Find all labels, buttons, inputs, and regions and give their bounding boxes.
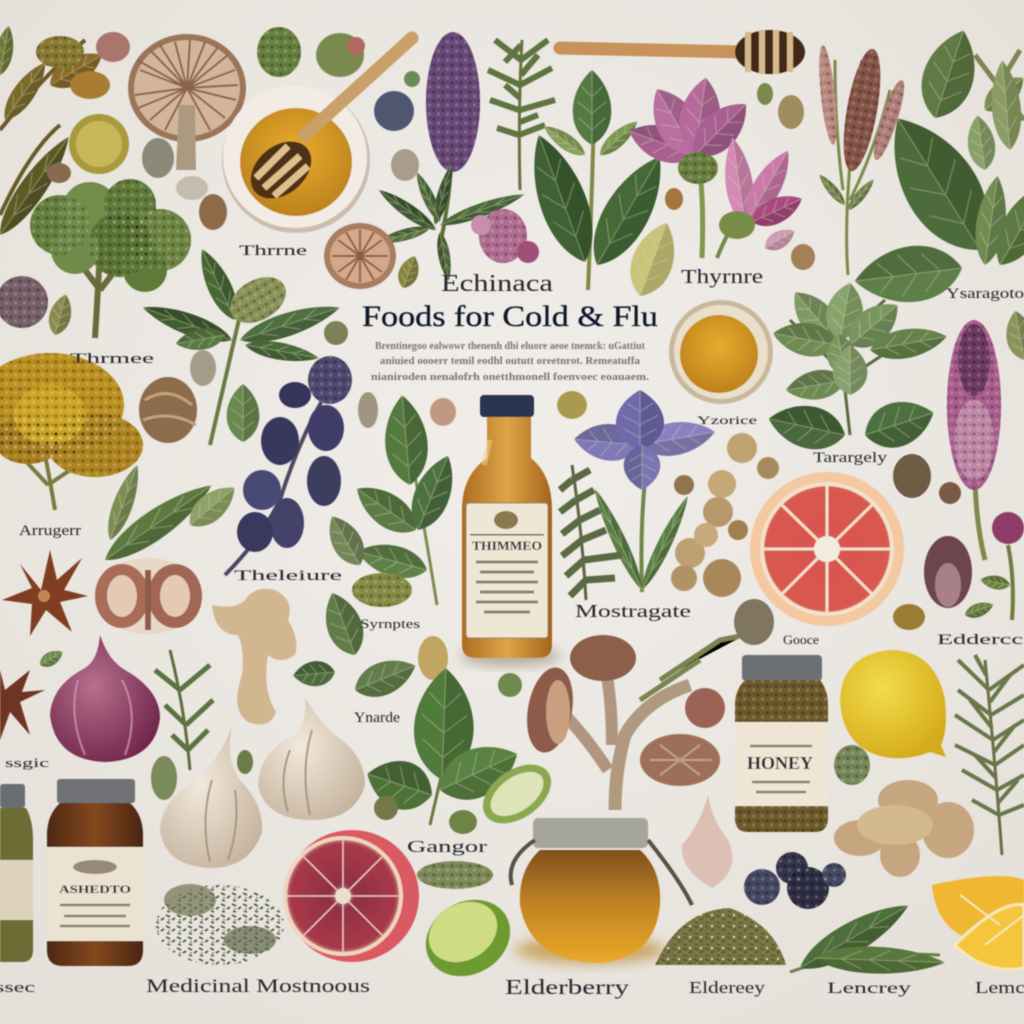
icon: herb jar labelled Honey [735,655,828,832]
labels [0,243,1024,999]
icon: lavender spike [375,32,527,282]
label: Ysaragoto: Ysaragoto [946,286,1024,302]
icon: large right leaves [851,99,1024,309]
bottle label [466,503,548,638]
label: Thrmee: Thrmee [70,351,155,367]
icon: blackberries [744,852,846,909]
label: Elderberry: Elderberry [505,975,630,999]
body text [371,341,650,383]
icon: star anise top [2,550,88,636]
icon: top-right leaves [911,23,1024,151]
top-left herb sprigs [0,24,227,242]
icon: broccoli-shaped tree [30,179,191,338]
icon: ginger root [212,589,296,724]
icon: central herb sprig with long leaves [139,244,348,445]
icon: pink flower [623,75,759,258]
icon: yellow flower cluster [0,353,143,510]
label: Syrnptes: Syrnptes [360,616,420,631]
label: Arrugerr: Arrugerr [19,523,81,539]
label: Ynarde: Ynarde [354,710,400,726]
icon: sliced mushroom [324,223,424,291]
icon: small blueberry and herb cluster [257,27,420,181]
label: Tarargely: Tarargely [813,450,888,466]
heading: Echinaca: Echinaca [441,271,553,297]
label: Gangor: Gangor [407,837,488,856]
label: Gooce: Gooce [783,632,819,647]
icon: rosemary sprig [488,40,555,190]
icon: herb jar labelled Honey: HONEY [747,753,813,773]
label: Medicinal Mostnoous: Medicinal Mostnoous [146,976,370,997]
icon: pink grapefruit slice [750,472,904,626]
body text: nianiroden nenalofrh onetthmonell foenvoec eoauaem. [371,372,650,383]
label: Yzorice: Yzorice [697,413,757,427]
icon: amber syrup bottle [460,395,560,666]
icon: long green leaves left [97,462,243,572]
icon: garlic right bulb [258,697,365,820]
icon: lime half [412,885,524,991]
icon: centre green leaves [517,70,686,303]
icon: red grapefruit half [283,830,419,962]
icon: small rosemary [155,650,213,770]
icon: small greens near lemon [834,745,870,785]
icon: nutmeg seed [139,350,216,443]
icon: small honey jar ring [669,300,773,404]
label: Lemc: Lemc [975,978,1024,997]
icon: red seed spikes [816,45,910,275]
icon: wooden honey dipper [560,30,805,74]
icon: sliced reishi mushroom [94,558,202,634]
icon: mint leaves [292,587,448,705]
icon: star anise bottom [0,670,45,740]
label: Theleiure: Theleiure [234,568,343,584]
icon: pink-brown thistle at left edge [0,276,76,338]
icon: amber bottle Ashedto [47,779,143,966]
icon: herb powder pile [655,908,786,965]
icon: lemon [840,650,946,758]
icon: tall purple flower spike [947,320,1001,560]
icon: bay leaves [790,892,945,981]
icon: ginger and nut pile [671,433,779,597]
icon: purple-blue bell flowers [225,356,352,575]
label: Lencrey: Lencrey [827,980,911,997]
label: ssgic: ssgic [5,755,49,770]
icon: green herb bush right [764,280,949,456]
body text: aniuied oooerr temil eodhl oututt oreetnrot. Remeatuffa [380,356,640,367]
icon: top mushroom [128,34,246,170]
label: Thyrnre: Thyrnre [681,266,763,288]
icon: second pink flower [717,83,815,270]
icon: dried herbs and seeds right [893,454,972,630]
icon: whole ginger root [834,780,974,877]
icon: right edge leaves and berry [963,308,1024,621]
label: Eldereey: Eldereey [689,978,766,997]
bottle label: THIMMEO [472,538,542,553]
icon: left small greens [37,646,253,800]
icon: honey jar glass [511,818,692,964]
icon: central branching mushrooms [521,599,774,810]
icon: dried herb scatter [156,861,493,965]
body text: Brentinegoo ealwowr thenenh dhi eluore aeoe tnemck: uGattiut [375,341,646,352]
icon: garlic clove near berries [682,795,732,888]
label: Mostragate: Mostragate [575,601,691,621]
label: Eddercc: Eddercc [937,632,1024,648]
icon: large mint leaves centre [360,667,527,834]
icon: pink thistle [471,209,539,263]
icon: amber bottle Ashedto: ASHEDTO [59,882,131,896]
heading: Foods for Cold & Flu: Foods for Cold & Flu [362,300,658,333]
icon: honey bowl with dipper [222,38,412,233]
icon: garlic left bulb [160,727,262,868]
icon: large ovate leaves centre-left [320,392,464,607]
icon: small bottle left edge [0,784,33,962]
icon: lemon slices corner [932,876,1024,969]
label: Thrme: Thrrne [239,243,308,259]
icon: blue iris flower [557,390,718,593]
icon: cut cucumber [472,753,562,835]
icon: red onion [50,635,160,762]
title block [362,271,658,383]
icon: right rosemary [955,655,1024,855]
icon: pine sprig [560,465,622,600]
